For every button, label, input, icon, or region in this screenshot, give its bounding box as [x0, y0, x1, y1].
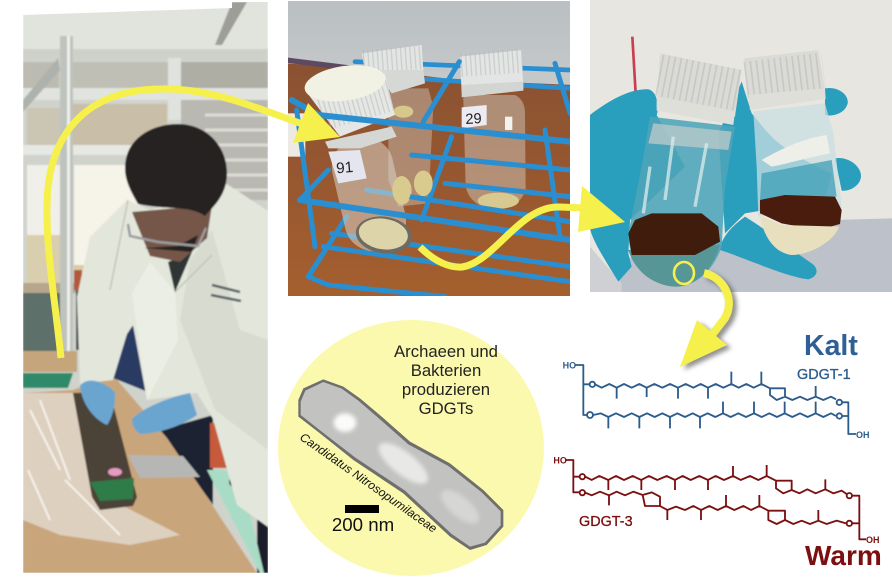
circle: yellow panel with microscope image	[278, 320, 544, 576]
front rails	[292, 100, 570, 240]
label: GDGT-1: GDGT-1	[797, 367, 851, 383]
scale bar	[345, 505, 379, 513]
back board and green label	[23, 351, 77, 372]
arrow: from vials to extraction photo	[420, 186, 625, 267]
back rails	[355, 62, 570, 88]
glasses	[128, 224, 206, 246]
caption: Archaeen und Bakterien produzieren GDGTs	[394, 342, 498, 418]
face	[132, 205, 212, 262]
caption: Archaeen und Bakterien produzieren GDGTs: produzieren	[402, 380, 490, 399]
left vial	[628, 53, 742, 287]
label: Warm: Warm	[805, 540, 882, 571]
molecule: GDGT-1 (blue): HO	[563, 361, 576, 371]
foil	[128, 455, 200, 478]
sediment core	[73, 392, 137, 510]
arrow: from extraction photo to molecules	[680, 273, 733, 370]
floor	[207, 470, 264, 573]
right vial	[744, 50, 842, 255]
right vial	[460, 50, 526, 209]
marker: circle on vial sediment	[674, 262, 694, 284]
caption: Archaeen und Bakterien produzieren GDGTs: GDGTs	[419, 399, 473, 418]
plastic wrap	[23, 393, 180, 545]
table top	[23, 375, 257, 573]
label: GDGT-3: GDGT-3	[579, 514, 633, 530]
right vial: 29	[465, 111, 482, 128]
gloves	[80, 381, 115, 425]
panel: photo of vials in a blue rack	[285, 0, 575, 300]
molecule: GDGT-1 (blue)	[563, 361, 869, 440]
label: Kalt: Kalt	[804, 330, 858, 362]
caption: Archaeen und Bakterien produzieren GDGTs: Bakterien	[411, 361, 481, 380]
scale label: 200 nm	[332, 514, 394, 535]
dark trousers	[160, 415, 213, 505]
back vial	[362, 45, 433, 207]
molecule: GDGT-1 (blue): OH	[856, 430, 869, 440]
front vial: 91	[336, 159, 354, 177]
front vial	[302, 61, 433, 257]
blue glove	[590, 82, 861, 282]
arrow: from researcher photo to vials	[47, 89, 340, 358]
caption: Archaeen und Bakterien produzieren GDGTs: Archaeen und	[394, 342, 498, 361]
panel: photo of gloved hand holding extraction vials	[590, 0, 892, 293]
molecule: GDGT-3 (red): OH	[866, 535, 879, 545]
molecule: GDGT-3 (red): HO	[553, 455, 567, 465]
micrograph of cell	[298, 379, 503, 550]
molecule: GDGT-3 (red)	[553, 455, 879, 545]
window post	[60, 36, 73, 352]
lower rails and posts	[297, 62, 570, 297]
coat embroidery	[211, 285, 241, 301]
shirt	[168, 252, 192, 292]
lab coat	[77, 184, 268, 527]
species name: Candidatus Nitrosopumilaceae	[297, 430, 440, 536]
panel: photo of researcher sampling a sediment core	[23, 0, 268, 573]
hair	[125, 124, 227, 216]
red box	[210, 423, 231, 468]
